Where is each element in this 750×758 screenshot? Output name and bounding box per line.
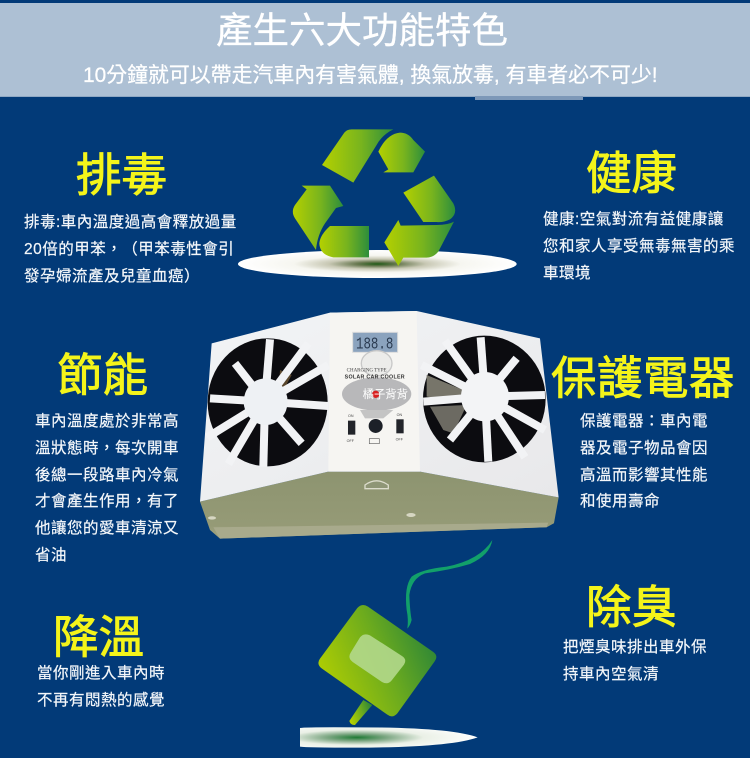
text: energy saving: 才會產生作用，有了	[35, 493, 179, 510]
text: energy saving: 後總一段路車內冷氣	[35, 467, 179, 484]
panel: deodorize	[563, 571, 707, 683]
text: protect electronics: 器及電子物品會因	[580, 440, 708, 457]
header band	[0, 3, 750, 97]
device labels: OFF	[396, 438, 404, 442]
panel: energy saving	[35, 339, 179, 564]
base ellipse	[238, 250, 517, 278]
solar car cooler device	[200, 311, 559, 539]
text: detox	[24, 214, 237, 285]
text: health: 車環境	[543, 265, 591, 282]
text: health	[543, 210, 735, 282]
device labels	[345, 368, 405, 443]
header tab	[475, 96, 583, 100]
icon: leaf sign	[300, 540, 492, 748]
text: cooling: 當你剛進入車內時	[37, 665, 165, 682]
smoke wisp	[406, 540, 492, 629]
text: detox: 20倍的甲苯，（甲苯毒性會引	[24, 241, 234, 258]
text: deodorize	[563, 638, 707, 683]
icon: recycling symbol	[238, 129, 517, 278]
panel: detox	[24, 139, 237, 285]
device labels: ON	[397, 413, 402, 417]
heading: cooling: 降溫	[53, 601, 144, 667]
text: deodorize: 持車內空氣清	[563, 666, 659, 683]
device labels: OFF	[347, 439, 355, 443]
leaf body	[318, 605, 436, 716]
text: protect electronics: 保護電器：車內電	[580, 413, 708, 430]
device top panel	[200, 311, 559, 502]
text: energy saving: 省油	[35, 547, 67, 564]
watermark mascot	[342, 351, 411, 418]
text: energy saving: 他讓您的愛車清涼又	[35, 520, 179, 537]
text: energy saving	[35, 412, 179, 564]
text: cooling: 不再有悶熱的感覺	[37, 692, 165, 709]
LCD display	[353, 332, 398, 355]
switches and knob	[348, 419, 404, 444]
text: protect electronics	[580, 412, 708, 510]
text: health: 健康:空氣對流有益健康讓	[543, 211, 724, 228]
device labels: CHARGING TYPE	[347, 368, 387, 373]
heading: detox: 排毒	[76, 139, 167, 205]
device labels: ON	[348, 414, 354, 418]
heading: health: 健康	[586, 137, 677, 203]
text: health: 您和家人享受無毒無害的乘	[543, 238, 735, 255]
LCD display: 188.8	[356, 336, 393, 355]
panel: protect electronics	[551, 342, 735, 510]
text: protect electronics: 高溫而影響其性能	[580, 467, 708, 484]
watermark mascot: 橘子背背	[363, 387, 408, 401]
left fan	[207, 338, 328, 467]
leaf highlight	[349, 634, 405, 683]
heading: deodorize: 除臭	[586, 571, 677, 637]
subtitle: 10分鐘就可以帶走汽車內有害氣體, 換氣放毒, 有車者必不可少!	[83, 64, 658, 87]
recycle arrow top	[322, 129, 425, 183]
device labels: SOLAR CAR COOLER	[345, 375, 405, 381]
heading: energy saving: 節能	[57, 339, 148, 405]
title: 產生六大功能特色	[216, 10, 508, 51]
right fan	[422, 336, 546, 462]
text: detox: 排毒:車內溫度過高會釋放過量	[24, 214, 237, 231]
text: cooling	[37, 664, 165, 709]
heading: protect electronics: 保護電器	[551, 342, 735, 408]
text: detox: 發孕婦流產及兒童血癌）	[24, 268, 200, 285]
text: energy saving: 溫狀態時，每次開車	[35, 440, 179, 457]
panel: health	[543, 137, 735, 282]
recycle arrow right	[384, 176, 455, 266]
panel: cooling	[37, 601, 165, 709]
device lower body	[200, 472, 559, 539]
recycle arrow left	[293, 186, 369, 257]
text: energy saving: 車內溫度處於非常高	[35, 413, 179, 430]
text: protect electronics: 和使用壽命	[580, 493, 660, 510]
leaf stem	[349, 700, 372, 725]
ground ellipse	[300, 727, 478, 748]
text: deodorize: 把煙臭味排出車外保	[563, 639, 707, 656]
